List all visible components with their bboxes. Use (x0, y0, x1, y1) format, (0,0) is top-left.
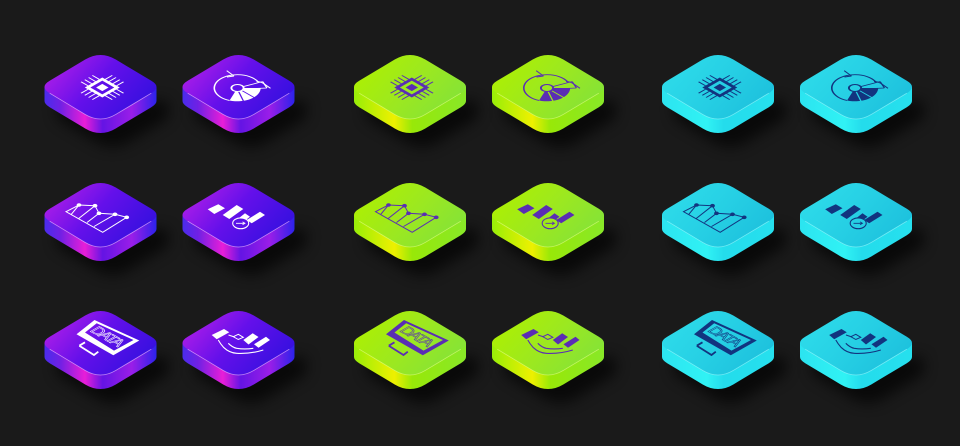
tile: line chart (354, 183, 478, 275)
panel: purple icon set (44, 55, 306, 403)
tile: monitor with DATA: DATA (86, 324, 129, 349)
tile: line chart (44, 183, 168, 275)
tile: hand holding bar chart (492, 311, 616, 403)
tile: pie chart disc (800, 55, 924, 147)
tile: monitor with DATA: DATA (703, 324, 747, 349)
panel: cyan icon set (662, 55, 924, 403)
tile: monitor with DATA: DATA (395, 324, 439, 349)
tile: processor chip (662, 55, 786, 147)
tile: hand holding bar chart (800, 311, 924, 403)
panel: green icon set (354, 55, 616, 403)
tile: monitor with DATA (354, 311, 478, 403)
tile: pie chart disc (182, 55, 306, 147)
tile: line chart (662, 183, 786, 275)
tile: bar chart with arrow badge (492, 183, 616, 275)
tile: bar chart with arrow badge (182, 183, 306, 275)
tile: monitor with DATA (44, 311, 168, 403)
tile: pie chart disc (492, 55, 616, 147)
tile: bar chart with arrow badge (800, 183, 924, 275)
tile: monitor with DATA (662, 311, 786, 403)
tile: hand holding bar chart (182, 311, 306, 403)
tile: processor chip (44, 55, 168, 147)
tile: processor chip (354, 55, 478, 147)
